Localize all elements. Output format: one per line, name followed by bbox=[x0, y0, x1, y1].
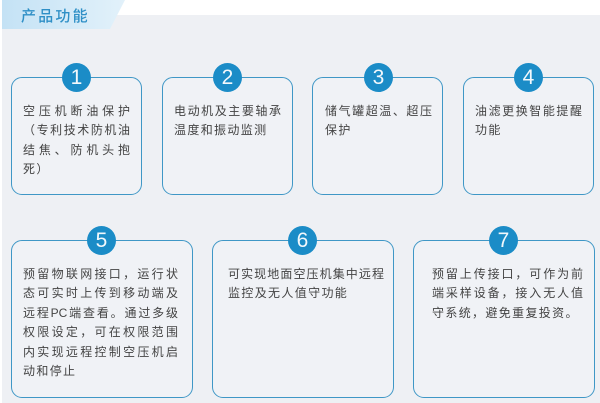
badge 7: 7 bbox=[498, 229, 509, 252]
text: feature 1: 结焦、防机头抱 bbox=[23, 142, 130, 156]
text: feature 2: 温度和振动监测 bbox=[174, 123, 267, 137]
text: feature 2: 电动机及主要轴承 bbox=[174, 104, 281, 118]
badge 4: 4 bbox=[523, 66, 534, 89]
badge 4 bbox=[514, 63, 543, 92]
text: feature 3 bbox=[325, 104, 432, 137]
panel: feature 5 bbox=[11, 240, 193, 398]
badge 6 bbox=[288, 226, 317, 255]
text: feature 5: 动和停止 bbox=[23, 364, 76, 378]
text: feature 6: 可实现地面空压机集中远程 bbox=[228, 266, 384, 280]
badge 7 bbox=[489, 226, 518, 255]
text: feature 7: 端采样设备，接入无人值 bbox=[432, 286, 583, 300]
text: feature 7: 守系统，避免重复投资。 bbox=[432, 306, 579, 320]
text: feature 3: 保护 bbox=[325, 123, 352, 137]
badge 2 bbox=[213, 63, 242, 92]
text: feature 4: 油滤更换智能提醒 bbox=[475, 104, 582, 118]
text: feature 1: （专利技术防机油 bbox=[23, 123, 130, 137]
badge 5 bbox=[87, 226, 116, 255]
text: feature 5: 态可实时上传到移动端及 bbox=[23, 286, 178, 300]
badge 5: 5 bbox=[96, 229, 107, 252]
text: feature 1: 死） bbox=[23, 162, 50, 176]
badge 1: 1 bbox=[71, 66, 82, 89]
panel: feature 6 bbox=[212, 240, 394, 398]
badge 6: 6 bbox=[297, 229, 308, 252]
badge 1 bbox=[62, 63, 91, 92]
text: feature 7: 预留上传接口，可作为前 bbox=[432, 266, 583, 280]
text: feature 5: 内实现远程控制空压机启 bbox=[23, 344, 178, 358]
badge 2: 2 bbox=[222, 66, 233, 89]
text: feature 6: 监控及无人值守功能 bbox=[228, 286, 348, 300]
text: feature 5: 权限设定，可在权限范围 bbox=[23, 325, 178, 339]
text: feature 6 bbox=[228, 266, 384, 300]
panel: feature 2 bbox=[162, 77, 293, 195]
badge 3: 3 bbox=[373, 66, 384, 89]
text: feature 3: 储气罐超温、超压 bbox=[325, 104, 432, 118]
text: feature 4: 功能 bbox=[475, 123, 502, 137]
panel: feature 3 bbox=[312, 77, 443, 195]
text: feature 2 bbox=[174, 104, 281, 137]
text: feature 1 bbox=[23, 104, 130, 176]
text: feature 4 bbox=[475, 104, 582, 137]
title banner bbox=[2, 0, 125, 29]
text: feature 5: 远程PC端查看。通过多级 bbox=[23, 306, 178, 320]
text: feature 7 bbox=[432, 266, 583, 320]
panel: feature 1 bbox=[11, 77, 142, 195]
panel: feature 7 bbox=[413, 240, 595, 398]
text: feature 1: 空压机断油保护 bbox=[23, 104, 130, 118]
panel: feature 4 bbox=[463, 77, 594, 195]
heading: 产品功能 bbox=[21, 8, 90, 25]
text: feature 5 bbox=[23, 266, 178, 378]
badge 3 bbox=[364, 63, 393, 92]
text: feature 5: 预留物联网接口，运行状 bbox=[23, 266, 178, 280]
